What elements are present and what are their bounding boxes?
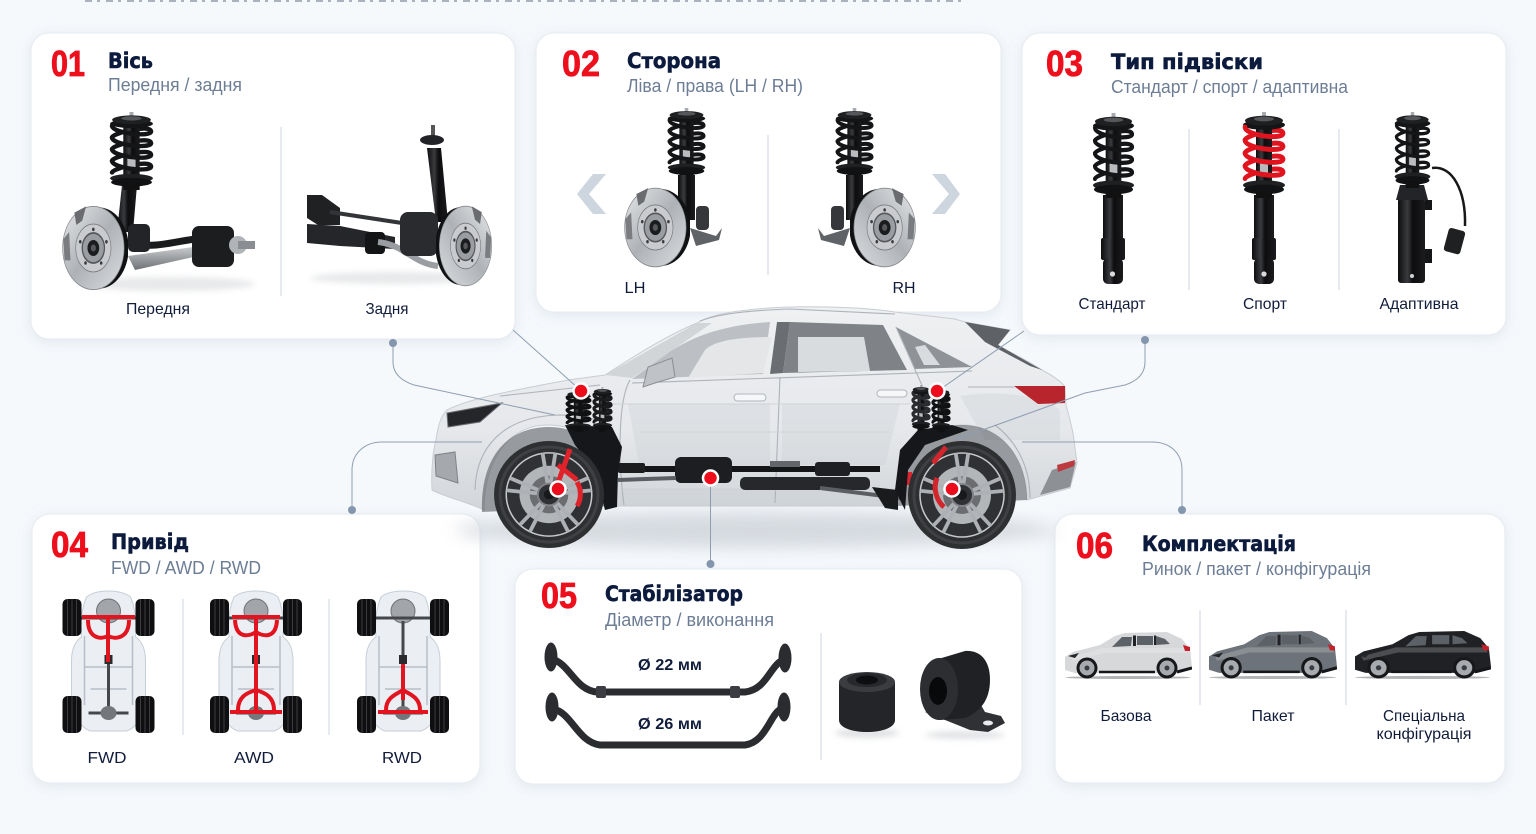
bracket bushing	[920, 651, 1005, 739]
hotspot: wheel front	[550, 482, 566, 496]
heading: stabilizer: Стабілізатор	[605, 582, 743, 606]
label: 22 mm: Ø 22 мм	[638, 657, 702, 674]
number 06: 06	[1076, 525, 1113, 566]
heading: suspension type: Тип підвіски	[1111, 50, 1263, 74]
subtitle: side: Ліва / права (LH / RH)	[627, 76, 803, 96]
divider	[1199, 610, 1201, 705]
stabilizer bar 26 mm	[546, 692, 790, 745]
divider	[182, 599, 184, 735]
rear wheel	[908, 441, 1016, 549]
panel 04: drive	[32, 514, 480, 783]
divider	[820, 633, 822, 760]
heading: drive: Привід	[111, 530, 189, 554]
heading: axle: Вісь	[108, 49, 153, 73]
chassis: AWD	[210, 591, 302, 733]
divider	[1338, 129, 1340, 290]
number 02: 02	[562, 43, 600, 84]
heading: trim: Комплектація	[1142, 532, 1296, 556]
label: RWD: RWD	[382, 750, 422, 767]
number 01: 01	[51, 43, 85, 84]
label: package: Пакет	[1252, 708, 1295, 725]
front axle assembly	[63, 112, 255, 291]
label: special configuration: Спеціальна	[1383, 708, 1465, 725]
divider	[767, 135, 769, 275]
door handles	[734, 390, 907, 401]
number 05: 05	[541, 575, 577, 616]
label: LH: LH	[624, 280, 646, 297]
panel 05: stabilizer	[515, 569, 1022, 784]
rear bumper trim	[1040, 462, 1076, 495]
subtitle: suspension type: Стандарт / спорт / адаптивна	[1111, 77, 1349, 97]
rear struts	[912, 385, 950, 432]
front grille	[435, 452, 458, 483]
subtitle: axle: Передня / задня	[108, 75, 242, 95]
central car illustration	[432, 307, 1077, 549]
hotspot: stabilizer	[703, 470, 718, 486]
hotspot: strut rear	[930, 384, 944, 398]
front struts	[566, 387, 612, 432]
number 04: 04	[51, 524, 88, 565]
label: sport: Спорт	[1243, 296, 1288, 313]
subtitle: stabilizer: Діаметр / виконання	[605, 610, 774, 630]
panel 02: side	[536, 33, 1001, 312]
standard strut	[1093, 113, 1134, 284]
panel 06: trim	[1055, 514, 1505, 783]
label: configuration line 2: конфігурація	[1376, 726, 1472, 743]
front brake highlight	[558, 449, 580, 506]
mirror	[643, 358, 675, 387]
divider	[280, 127, 282, 296]
label: FWD: FWD	[88, 750, 126, 767]
heading: side: Сторона	[627, 49, 721, 73]
divider	[1188, 129, 1190, 290]
front knuckle	[565, 425, 622, 510]
left strut assembly	[625, 108, 722, 267]
headlight	[447, 403, 502, 427]
front wheel	[494, 441, 604, 548]
label: 26 mm: Ø 26 мм	[638, 716, 702, 733]
chassis: FWD	[62, 591, 154, 733]
label: base: Базова	[1100, 708, 1152, 725]
tail light	[1014, 386, 1065, 404]
rear axle assembly	[307, 125, 492, 286]
label: rear: Задня	[366, 301, 408, 318]
chassis: RWD	[357, 591, 449, 733]
icon: right chevron	[932, 174, 960, 214]
body lines and trim	[475, 309, 1030, 505]
subtitle: trim: Ринок / пакет / конфігурація	[1142, 559, 1371, 579]
label: standard: Стандарт	[1078, 296, 1146, 313]
windows	[605, 322, 1042, 379]
car: special black	[1355, 631, 1491, 679]
label: adaptive: Адаптивна	[1380, 296, 1459, 313]
hotspot: strut front	[574, 384, 588, 398]
adaptive strut	[1395, 112, 1466, 283]
label: AWD: AWD	[234, 750, 274, 767]
rear knuckle	[895, 425, 968, 510]
round bushing	[835, 672, 899, 738]
divider	[328, 599, 330, 735]
see-through interior shapes	[620, 394, 1060, 506]
panel 03: suspension type	[1022, 33, 1506, 335]
sport strut	[1243, 112, 1285, 284]
icon: left chevron	[577, 174, 606, 214]
car: package grey	[1209, 631, 1337, 679]
label: front: Передня	[126, 301, 190, 318]
hotspot: wheel rear	[944, 482, 960, 496]
connector lines	[348, 330, 1186, 568]
number 03: 03	[1046, 43, 1083, 84]
hotspots	[550, 384, 960, 496]
right strut assembly	[818, 108, 915, 267]
panel 01: axle	[31, 33, 515, 339]
wheel arches	[482, 425, 1027, 512]
car body	[432, 307, 1077, 510]
car: base white	[1065, 632, 1192, 679]
rear brake highlight	[933, 447, 946, 507]
rear reflector	[1057, 460, 1075, 472]
underbody drivetrain	[618, 457, 912, 510]
subtitle: drive: FWD / AWD / RWD	[111, 558, 261, 578]
label: RH: RH	[892, 280, 916, 297]
divider	[1345, 610, 1347, 705]
stabilizer bar 22 mm	[544, 642, 792, 698]
